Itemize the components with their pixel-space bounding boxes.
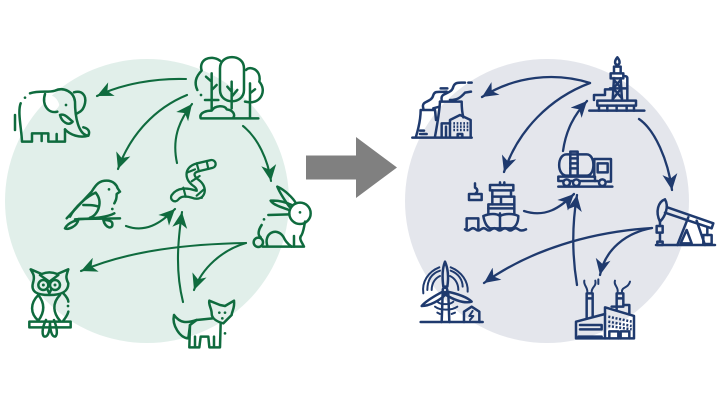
icon: owl [29,269,71,337]
arrow: ship to truck [524,194,574,213]
icon: tanker truck [558,152,612,187]
arrow: trees to bird [118,95,187,169]
arrow: fox to worm [178,212,183,302]
arrow: rabbit to fox [194,243,246,290]
arrow: oil rig to power plant [482,77,590,97]
arrow: truck to oil rig [563,101,587,151]
icon: trees [196,57,263,118]
arrow: oil rig to ship [504,83,590,172]
arrow: rabbit to owl [81,243,246,271]
arrow: oil rig to pump jack [639,119,672,190]
icon: bird on branch [65,181,120,229]
icon: oil pump jack [656,199,715,245]
arrow: worm to trees [175,104,192,163]
icon: elephant [15,89,89,142]
arrow: bird to worm [126,209,175,228]
arrow: grey transition arrow [306,137,397,198]
arrow: pump jack to wind turbine [484,228,652,283]
icon: wind turbine with power house [421,262,483,322]
green background circle [5,59,289,343]
icon: worm [175,161,212,199]
arrow: factory to truck [573,195,577,285]
icon: factory [576,279,634,338]
arrow: pump jack to factory [600,228,652,275]
icon: fox [174,301,234,347]
icon: container ship [465,182,526,230]
icon: rabbit [254,187,311,247]
icon: oil rig [589,57,644,111]
panel: industrial ecosystem [405,57,715,343]
arrow: trees to rabbit [243,126,271,181]
arrow: trees to elephant [97,79,186,96]
panel: natural ecosystem [5,57,311,347]
icon: power plant [412,83,472,138]
grey background circle [405,59,689,343]
